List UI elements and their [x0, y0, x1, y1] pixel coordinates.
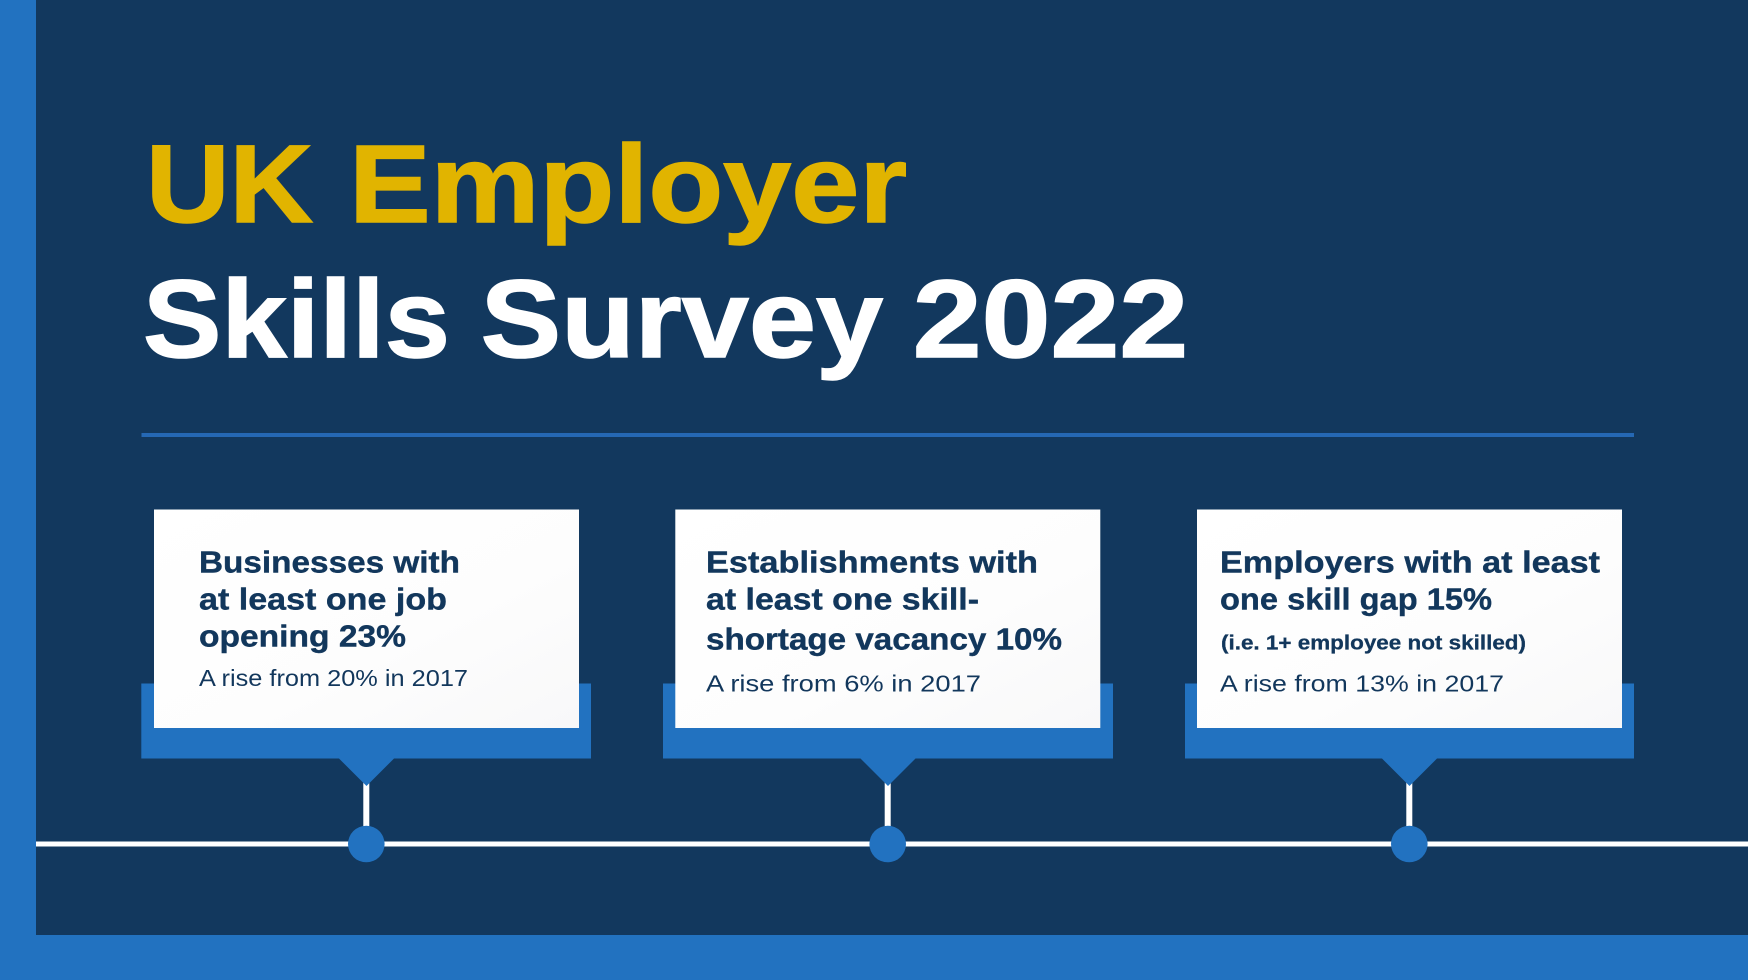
card heading: at least one job [199, 582, 447, 616]
blue band with pointer [141, 684, 591, 786]
timeline line [36, 842, 1748, 846]
panel: employers with skill gap [1185, 510, 1634, 862]
connector stem [363, 780, 369, 829]
card heading: opening 23% [199, 618, 406, 654]
title line 2: Survey [481, 258, 883, 381]
card note: A rise from 6% in 2017 [706, 670, 981, 696]
white card [1197, 510, 1622, 728]
panel: establishments with skill-shortage vacancy [663, 510, 1113, 862]
blue band with pointer [663, 684, 1113, 786]
card heading: Employers with at least [1220, 544, 1600, 580]
title line 1: UK [146, 123, 313, 246]
card heading: Businesses with [199, 544, 460, 580]
title [143, 123, 1188, 381]
title line 1: Employer [349, 123, 907, 246]
card heading: shortage vacancy 10% [706, 622, 1062, 656]
card heading: one skill gap 15% [1220, 582, 1492, 616]
card note: A rise from 20% in 2017 [199, 665, 468, 691]
left blue border [0, 0, 36, 980]
timeline marker [1391, 826, 1428, 862]
white card [675, 510, 1100, 728]
card heading: at least one skill- [706, 582, 979, 616]
card heading: Establishments with [706, 544, 1038, 580]
card qualifier: (i.e. 1+ employee not skilled) [1221, 632, 1526, 654]
blue band with pointer [1185, 684, 1634, 786]
bottom blue border [0, 935, 1748, 980]
title line 2: Skills [143, 258, 450, 381]
panel: businesses with job opening [141, 510, 591, 862]
connector stem [885, 780, 891, 829]
connector stem [1406, 780, 1412, 829]
title line 2: 2022 [913, 258, 1188, 381]
white card [154, 510, 579, 728]
timeline marker [348, 826, 385, 862]
card note: A rise from 13% in 2017 [1220, 670, 1504, 696]
timeline marker [869, 826, 906, 862]
divider [142, 433, 1634, 437]
